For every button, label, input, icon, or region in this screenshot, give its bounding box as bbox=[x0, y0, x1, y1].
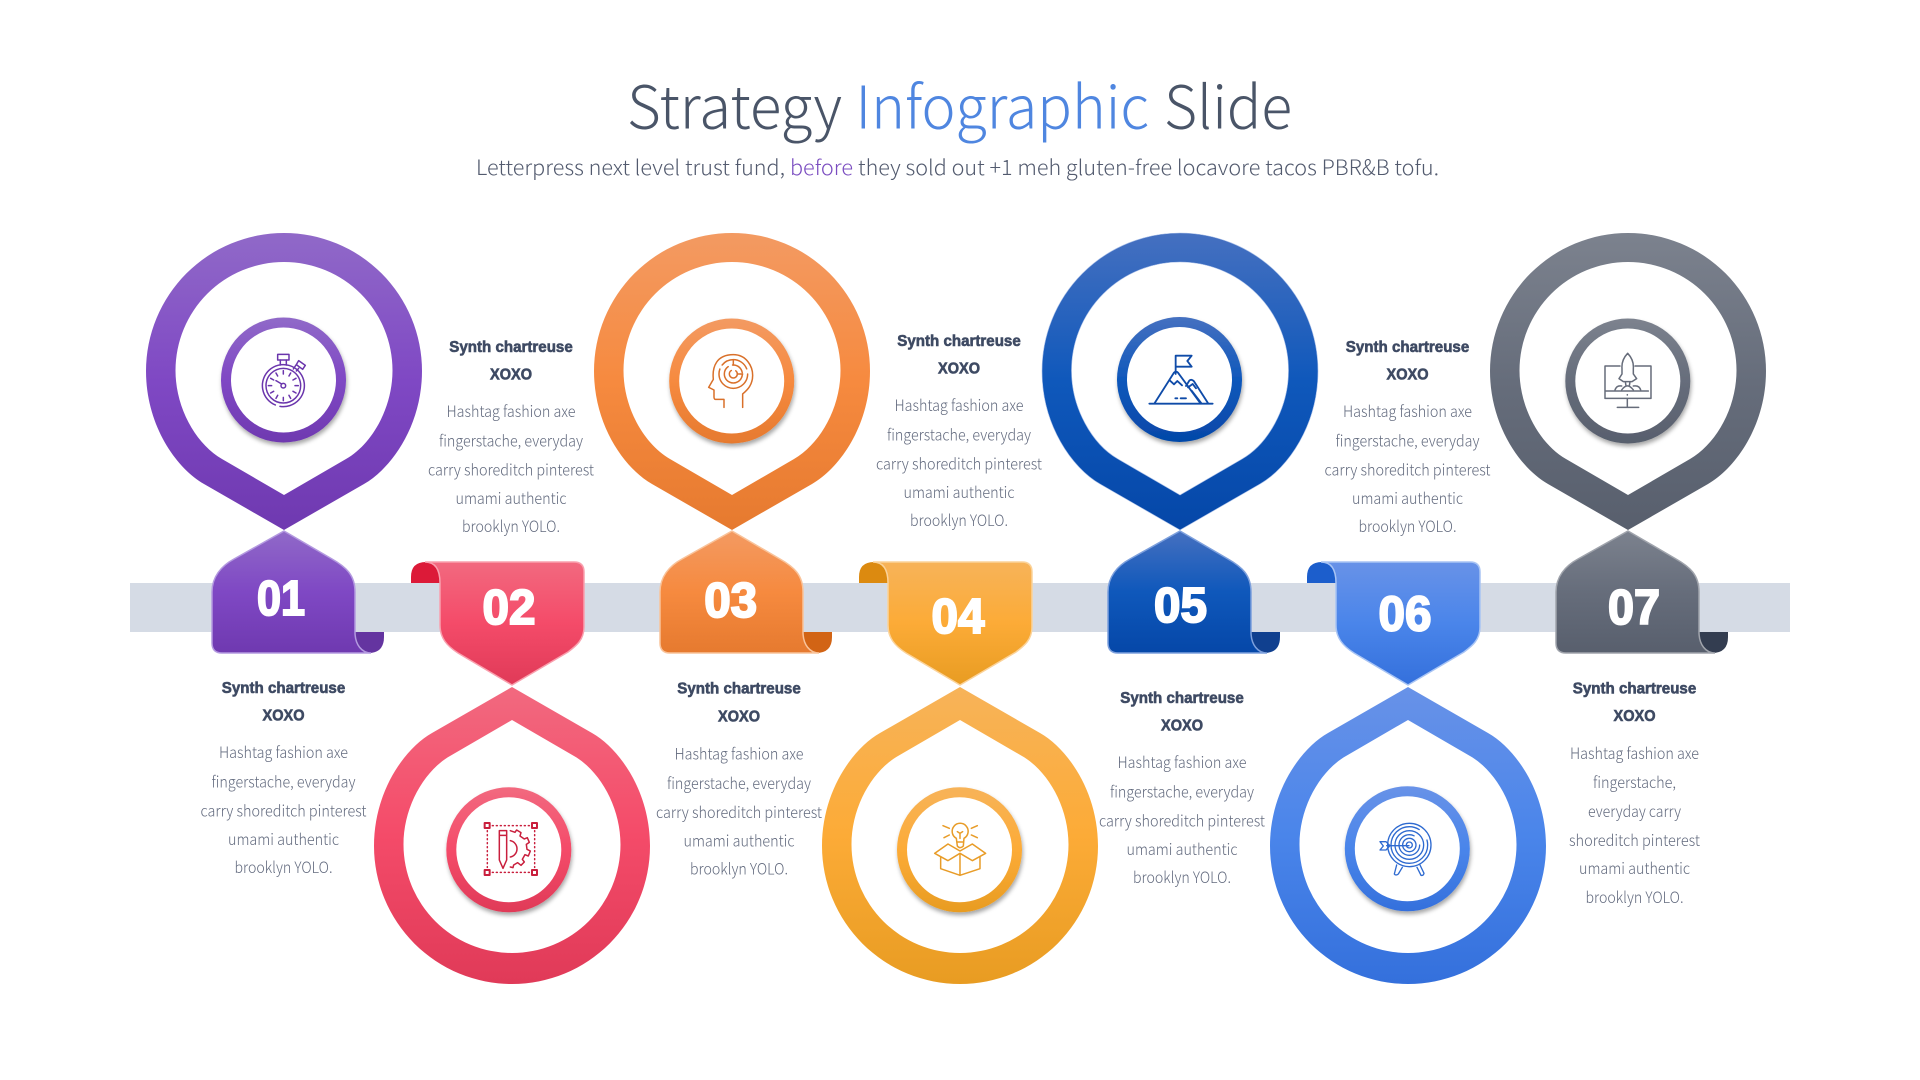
icon: rocket on monitor bbox=[1605, 353, 1651, 407]
icon ring 06 bbox=[1345, 786, 1470, 911]
text block 05: umami authentic bbox=[1126, 838, 1238, 860]
text block 04: carry shoreditch pinterest bbox=[876, 453, 1043, 475]
text block 03: Hashtag fashion axe bbox=[674, 742, 804, 764]
step 05 bbox=[1042, 233, 1318, 888]
text block 06: Synth chartreuse bbox=[1346, 339, 1469, 356]
text block 06 bbox=[1324, 339, 1491, 537]
text block 02 bbox=[428, 339, 595, 537]
pin 07 bbox=[1490, 233, 1766, 530]
text block 04: umami authentic bbox=[904, 481, 1015, 503]
pin 05 bbox=[1042, 233, 1318, 530]
text block 07 bbox=[1569, 680, 1701, 908]
text block 06: XOXO bbox=[1386, 367, 1428, 384]
icon: idea box bbox=[935, 823, 986, 875]
ribbon 02 bbox=[411, 562, 584, 685]
subtitle bbox=[476, 152, 1439, 182]
text block 06: umami authentic bbox=[1352, 487, 1463, 509]
icon: mountain with flag bbox=[1149, 356, 1213, 404]
text block 03: umami authentic bbox=[684, 830, 795, 852]
number 05: 05 bbox=[1154, 579, 1207, 633]
text block 07: fingerstache, bbox=[1593, 771, 1676, 793]
text block 06: brooklyn YOLO. bbox=[1358, 515, 1456, 537]
ribbon 01 bbox=[212, 531, 384, 653]
text block 03: brooklyn YOLO. bbox=[690, 858, 788, 880]
text block 03: XOXO bbox=[718, 708, 760, 725]
step 02 bbox=[374, 339, 650, 984]
ribbon 03 bbox=[660, 531, 832, 653]
step 01 bbox=[146, 233, 422, 878]
icon ring 01 bbox=[221, 318, 346, 442]
text block 04: XOXO bbox=[938, 361, 980, 378]
text block 05: XOXO bbox=[1161, 718, 1203, 735]
title: Slide bbox=[1164, 60, 1292, 146]
timeline band bbox=[130, 583, 1790, 632]
text block 03: Synth chartreuse bbox=[677, 681, 801, 698]
number 04: 04 bbox=[932, 590, 984, 644]
number 06: 06 bbox=[1378, 588, 1432, 642]
step 07 bbox=[1490, 233, 1766, 908]
icon: stopwatch bbox=[262, 354, 305, 407]
pin 02 bbox=[374, 687, 650, 984]
text block 01: carry shoreditch pinterest bbox=[200, 800, 367, 822]
text block 06: carry shoreditch pinterest bbox=[1324, 459, 1491, 481]
subtitle: before bbox=[790, 152, 853, 182]
text block 04 bbox=[876, 333, 1043, 531]
ribbon 07 bbox=[1556, 531, 1728, 653]
text block 04: Hashtag fashion axe bbox=[894, 394, 1024, 416]
text block 05 bbox=[1099, 690, 1266, 888]
icon ring 03 bbox=[669, 318, 794, 444]
icon ring 07 bbox=[1565, 318, 1690, 444]
text block 02: XOXO bbox=[490, 367, 532, 384]
text block 01: XOXO bbox=[262, 708, 304, 725]
text block 05: Hashtag fashion axe bbox=[1118, 751, 1246, 773]
number 02: 02 bbox=[482, 581, 536, 635]
text block 06: fingerstache, everyday bbox=[1336, 430, 1480, 452]
text block 02: Synth chartreuse bbox=[449, 339, 573, 356]
step 06 bbox=[1270, 339, 1546, 984]
pin 03 bbox=[594, 233, 870, 530]
subtitle: Letterpress next level trust fund, bbox=[476, 152, 785, 182]
text block 02: brooklyn YOLO. bbox=[462, 515, 560, 537]
number 01: 01 bbox=[257, 572, 305, 626]
icon ring 05 bbox=[1117, 317, 1242, 442]
text block 01: Synth chartreuse bbox=[222, 680, 345, 697]
title: Infographic bbox=[856, 60, 1149, 146]
pin 04 bbox=[822, 687, 1098, 984]
text block 07: everyday carry bbox=[1588, 800, 1681, 822]
text block 07: XOXO bbox=[1614, 708, 1656, 725]
text block 04: Synth chartreuse bbox=[897, 333, 1021, 350]
text block 04: brooklyn YOLO. bbox=[910, 509, 1008, 531]
text block 03 bbox=[656, 681, 823, 880]
ribbon 04 bbox=[859, 562, 1032, 685]
text block 02: umami authentic bbox=[456, 487, 567, 509]
number 03: 03 bbox=[704, 574, 757, 628]
icon ring 04 bbox=[897, 787, 1022, 912]
text block 07: umami authentic bbox=[1579, 857, 1690, 879]
ribbon 06 bbox=[1307, 562, 1480, 685]
text block 07: brooklyn YOLO. bbox=[1586, 886, 1684, 908]
text block 04: fingerstache, everyday bbox=[887, 424, 1031, 446]
text block 05: Synth chartreuse bbox=[1120, 690, 1244, 707]
step 04 bbox=[822, 333, 1098, 984]
text block 05: carry shoreditch pinterest bbox=[1099, 810, 1266, 832]
icon: head with maze bbox=[709, 355, 753, 407]
text block 01 bbox=[200, 680, 367, 878]
icon ring 02 bbox=[446, 787, 571, 912]
text block 01: brooklyn YOLO. bbox=[234, 856, 332, 878]
text block 02: carry shoreditch pinterest bbox=[428, 459, 595, 481]
ribbon 05 bbox=[1108, 531, 1280, 653]
text block 06: Hashtag fashion axe bbox=[1343, 400, 1472, 422]
text block 05: brooklyn YOLO. bbox=[1133, 866, 1231, 888]
text block 01: umami authentic bbox=[228, 828, 339, 850]
icon: target with arrow bbox=[1380, 823, 1431, 875]
text block 02: Hashtag fashion axe bbox=[446, 400, 576, 422]
text block 07: shoreditch pinterest bbox=[1569, 829, 1701, 851]
text block 07: Hashtag fashion axe bbox=[1570, 742, 1699, 764]
text block 01: Hashtag fashion axe bbox=[219, 741, 348, 763]
text block 01: fingerstache, everyday bbox=[212, 771, 356, 793]
pin 06 bbox=[1270, 687, 1546, 984]
number 07: 07 bbox=[1608, 581, 1660, 635]
text block 03: fingerstache, everyday bbox=[667, 772, 811, 794]
subtitle: they sold out +1 meh gluten-free locavore tacos PBR&B tofu. bbox=[858, 152, 1439, 182]
title bbox=[627, 60, 1292, 146]
text block 02: fingerstache, everyday bbox=[439, 430, 583, 452]
step 03 bbox=[594, 233, 870, 880]
text block 05: fingerstache, everyday bbox=[1110, 781, 1254, 803]
icon: pencil and gear bbox=[485, 823, 537, 875]
text block 03: carry shoreditch pinterest bbox=[656, 801, 823, 823]
text block 07: Synth chartreuse bbox=[1573, 680, 1696, 698]
pin 01 bbox=[146, 233, 422, 530]
title: Strategy bbox=[627, 60, 842, 146]
